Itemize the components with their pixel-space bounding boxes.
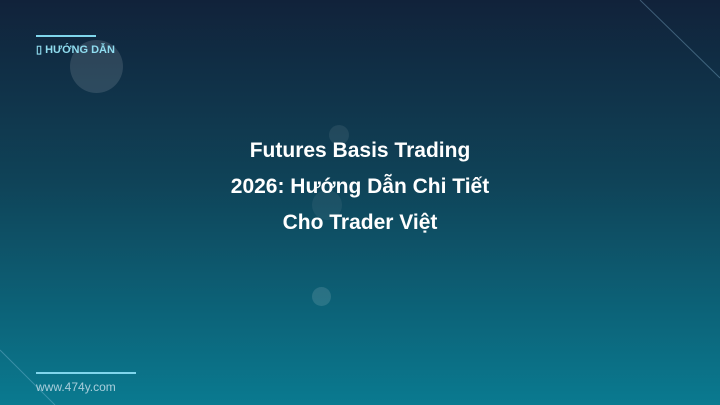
top accent line — [36, 35, 96, 37]
circle: small top — [329, 125, 349, 145]
circle: bottom — [312, 287, 331, 306]
category label: ▯ HƯỚNG DẪN — [36, 44, 115, 56]
circle: top left — [70, 40, 123, 93]
bottom accent line — [36, 372, 136, 374]
circle: middle — [312, 190, 342, 220]
title: 2026: Hướng Dẫn Chi Tiết — [231, 175, 489, 198]
title: Futures Basis Trading — [250, 139, 470, 162]
footer url: www.474y.com — [36, 380, 116, 394]
title: Cho Trader Việt — [283, 211, 437, 234]
title — [231, 139, 489, 234]
